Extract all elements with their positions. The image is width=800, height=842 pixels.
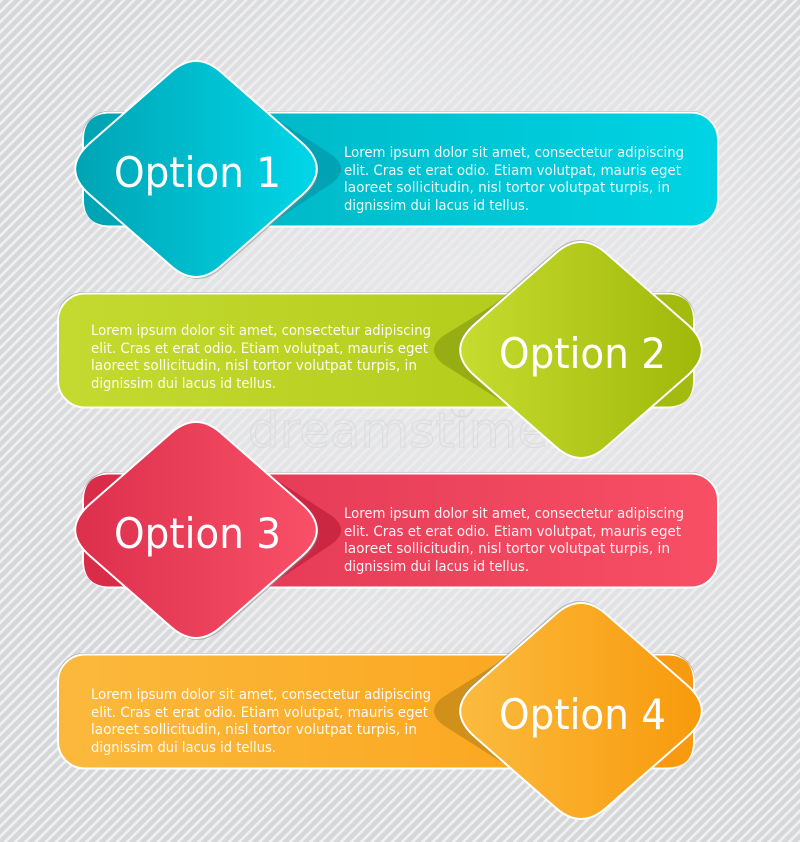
option 1 text: Lorem ipsum dolor sit amet, consectetur adipiscing bbox=[344, 145, 684, 161]
option 4 text: elit. Cras et erat odio. Etiam volutpat, mauris eget bbox=[91, 705, 428, 721]
option 1 text bbox=[344, 145, 684, 214]
option 3 diamond shadow bbox=[268, 474, 341, 586]
panel: option 1 bbox=[75, 61, 718, 279]
option 2 text: laoreet sollicitudin, nisl tortor volutpat turpis, in bbox=[91, 358, 417, 374]
option 2 bar outline bbox=[57, 292, 695, 407]
option 3 bar bbox=[83, 474, 718, 588]
panel: option 3 bbox=[75, 422, 718, 640]
option 2 diamond bbox=[459, 240, 702, 458]
option 4 text: Lorem ipsum dolor sit amet, consectetur adipiscing bbox=[91, 687, 431, 703]
option 4 label: Option 4 bbox=[499, 690, 666, 739]
option 4 text: laoreet sollicitudin, nisl tortor volutpat turpis, in bbox=[91, 722, 417, 738]
option 4 diamond shadow bbox=[434, 656, 510, 768]
option 3 label: Option 3 bbox=[114, 509, 281, 558]
option 4 text: dignissim dui lacus id tellus. bbox=[91, 740, 276, 756]
option 3 text: elit. Cras et erat odio. Etiam volutpat, mauris eget bbox=[344, 524, 681, 540]
option 4 diamond bbox=[459, 601, 702, 819]
option 3 text bbox=[344, 506, 684, 575]
option 2 label: Option 2 bbox=[499, 329, 666, 378]
option 2 text: Lorem ipsum dolor sit amet, consectetur adipiscing bbox=[91, 323, 431, 339]
option 3 left tab bbox=[84, 474, 150, 586]
panel: option 4 bbox=[57, 601, 702, 819]
watermark: dreamstime bbox=[248, 403, 548, 459]
option 1 diamond shadow bbox=[268, 114, 341, 226]
option 2 diamond shadow bbox=[434, 294, 510, 406]
option 2 bar bbox=[58, 294, 694, 408]
option 1 bar bbox=[83, 112, 718, 226]
option 3 text: dignissim dui lacus id tellus. bbox=[344, 559, 529, 575]
option 1 bar outline bbox=[82, 111, 718, 226]
option 2 right tab bbox=[630, 294, 693, 406]
option 3 bar outline bbox=[82, 472, 718, 587]
option 2 text: dignissim dui lacus id tellus. bbox=[91, 376, 276, 392]
option 1 left tab bbox=[84, 114, 150, 226]
option 1 text: elit. Cras et erat odio. Etiam volutpat, mauris eget bbox=[344, 163, 681, 179]
option 3 text: Lorem ipsum dolor sit amet, consectetur adipiscing bbox=[344, 506, 684, 522]
option 3 diamond bbox=[75, 422, 318, 640]
option 1 label: Option 1 bbox=[114, 148, 281, 197]
option 4 bar bbox=[58, 654, 694, 768]
option 2 text bbox=[91, 323, 431, 392]
option 1 text: dignissim dui lacus id tellus. bbox=[344, 198, 529, 214]
option 3 text: laoreet sollicitudin, nisl tortor volutpat turpis, in bbox=[344, 541, 670, 557]
option 4 bar outline bbox=[57, 653, 695, 768]
panel: option 2 bbox=[57, 240, 702, 458]
option 1 diamond bbox=[75, 61, 318, 279]
option 4 right tab bbox=[630, 656, 693, 768]
option 4 text bbox=[91, 687, 431, 756]
option 2 text: elit. Cras et erat odio. Etiam volutpat, mauris eget bbox=[91, 341, 428, 357]
option 1 text: laoreet sollicitudin, nisl tortor volutpat turpis, in bbox=[344, 180, 670, 196]
